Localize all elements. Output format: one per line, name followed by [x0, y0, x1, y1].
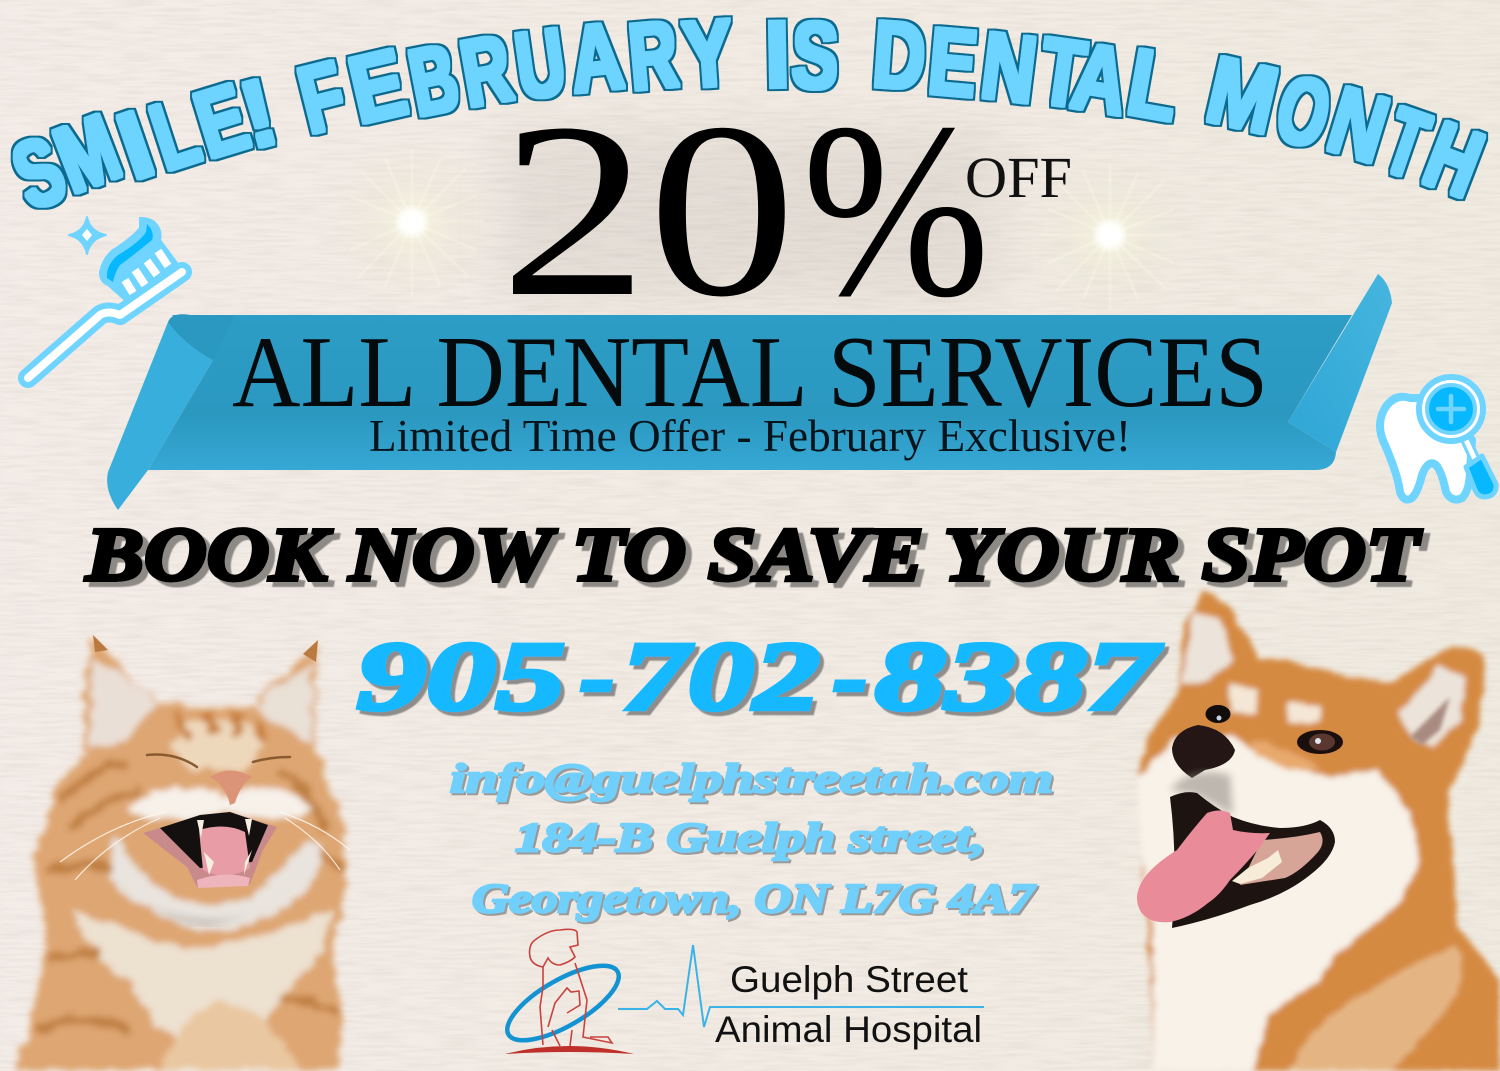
- photo: laughing cat: [13, 635, 350, 1071]
- title: curved heading: R: [625, 2, 682, 111]
- ribbon banner: [107, 274, 1392, 510]
- title: curved heading: F: [289, 40, 355, 154]
- title: curved heading: T: [1373, 87, 1440, 199]
- icon: toothbrush: [28, 217, 182, 378]
- cat: nose: [210, 770, 252, 805]
- title: curved heading: M: [42, 93, 133, 213]
- discount headline: 20% OFF: %: [802, 72, 990, 349]
- title: curved heading: R: [454, 16, 519, 128]
- title: curved heading: !: [230, 59, 288, 169]
- title: curved heading: L: [1120, 29, 1187, 141]
- title: curved heading: Y: [679, 0, 736, 109]
- dog: open mouth: [1170, 792, 1335, 928]
- title: curved heading: M: [1198, 36, 1287, 155]
- title: curved heading: I: [763, 2, 792, 108]
- email: info@guelphstreetah.com: [450, 755, 1053, 801]
- ribbon: left curl: [168, 314, 235, 360]
- address line 1: 184-B Guelph street,: [515, 814, 985, 860]
- dog: furry coat: [1137, 590, 1500, 1071]
- title: curved heading: U: [509, 9, 572, 120]
- logo: ground arc: [505, 1046, 634, 1054]
- title: curved heading: N: [976, 13, 1042, 124]
- logo: name line 1: Guelph Street: [730, 959, 969, 1000]
- phone number: 702: [622, 623, 820, 731]
- title: curved heading: E: [340, 29, 416, 144]
- title: curved heading: S: [0, 116, 79, 231]
- discount headline: 20% OFF: [500, 72, 1072, 349]
- title: curved heading: E: [183, 63, 259, 178]
- title: curved heading: E: [925, 7, 981, 117]
- title: curved heading: I: [105, 91, 167, 201]
- icon: tooth with magnifier: [1380, 377, 1496, 500]
- call to action: BOOK NOW TO SAVE YOUR SPOT: [85, 513, 1422, 597]
- sparkle: left: [327, 137, 497, 307]
- phone number: [357, 623, 1163, 731]
- photo: happy shiba dog: [1137, 590, 1500, 1071]
- ribbon: right fold: [1288, 274, 1392, 452]
- banner heading: ALL DENTAL SERVICES: [232, 316, 1268, 429]
- dog: eyes: [1206, 705, 1343, 754]
- phone number: 8387: [875, 623, 1163, 731]
- title: curved heading: N: [1317, 67, 1399, 184]
- title: curved heading: O: [1266, 55, 1341, 170]
- dog: inner mouth: [1240, 832, 1323, 885]
- title: curved heading: B: [402, 24, 466, 137]
- dog: nose: [1172, 725, 1235, 778]
- title: curved heading: S: [790, 2, 840, 109]
- banner subheading: Limited Time Offer - February Exclusive!: [369, 411, 1131, 461]
- logo: blue orbit: [497, 952, 629, 1054]
- cat: lower lip: [197, 874, 250, 888]
- phone number: 905: [357, 623, 565, 731]
- title: curved heading: L: [140, 78, 211, 191]
- title: curved heading: T: [1034, 17, 1092, 128]
- discount headline: 20% OFF: OFF: [965, 145, 1072, 210]
- cat: chin shadow: [150, 905, 275, 925]
- title: curved heading: [0, 0, 1496, 231]
- cat: furry body: [13, 640, 347, 1071]
- dog: inner ear shadow: [1410, 697, 1450, 745]
- title: curved heading: A: [1065, 23, 1135, 136]
- ribbon: left fold: [107, 322, 213, 510]
- logo: Guelph Street Animal Hospital: [497, 929, 984, 1054]
- phone number: -: [833, 623, 867, 731]
- title: curved heading: A: [565, 2, 628, 113]
- phone number: -: [580, 623, 614, 731]
- logo: heartbeat line: [618, 945, 984, 1027]
- sparkle: right: [1025, 150, 1195, 320]
- logo: name line 2: Animal Hospital: [715, 1009, 982, 1050]
- discount headline: 20% OFF: 20: [500, 72, 796, 349]
- address line 2: Georgetown, ON L7G 4A7: [472, 875, 1036, 921]
- cat: mouth lining: [143, 813, 277, 887]
- ribbon: main band: [148, 315, 1352, 470]
- logo: dog and cat line art: [530, 929, 612, 1046]
- cat: tongue: [199, 826, 250, 876]
- title: curved heading: H: [1412, 101, 1496, 218]
- cat: ear tips: [93, 635, 318, 662]
- dog: tongue: [1137, 810, 1270, 922]
- title: curved heading: D: [870, 1, 929, 110]
- cat: closed eyes: [147, 754, 290, 767]
- cat: whiskers: [60, 812, 350, 880]
- dog: teeth: [1232, 850, 1282, 884]
- cat: teeth: [197, 819, 252, 875]
- dog: muzzle shadow: [1170, 772, 1233, 815]
- cat: mouth interior: [160, 812, 268, 868]
